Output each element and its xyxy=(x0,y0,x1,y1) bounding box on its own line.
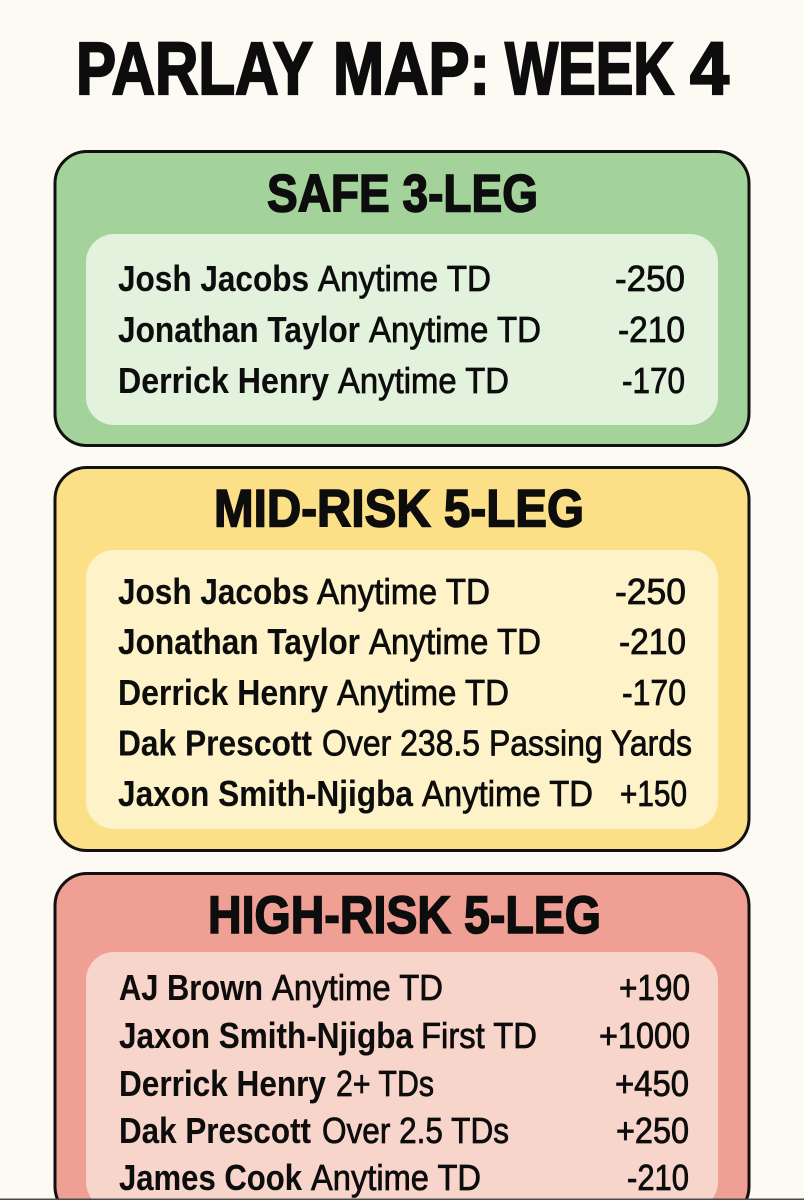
list: mid-risk 5-leg legs: Anytime TD xyxy=(337,672,509,713)
list: high-risk 5-leg legs: AJ Brown xyxy=(119,967,263,1008)
list: mid-risk 5-leg legs: -210 xyxy=(619,621,686,662)
list: high-risk 5-leg legs: Derrick Henry xyxy=(119,1063,326,1104)
list: high-risk 5-leg legs: 2+ TDs xyxy=(336,1063,434,1104)
panel: high-risk 5-leg xyxy=(55,874,749,1200)
title: WEEK xyxy=(505,27,674,110)
heading: high-risk 5-leg: HIGH-RISK 5-LEG xyxy=(208,886,601,945)
list: safe 3-leg legs: Anytime TD xyxy=(318,258,491,299)
list: high-risk 5-leg legs: Dak Prescott xyxy=(119,1110,311,1151)
list: safe 3-leg legs: -170 xyxy=(622,360,685,401)
list: mid-risk 5-leg legs: Jonathan Taylor xyxy=(118,621,360,662)
list: high-risk 5-leg legs: Jaxon Smith-Njigba xyxy=(119,1015,414,1056)
list: safe 3-leg legs: -210 xyxy=(618,309,685,350)
list: safe 3-leg legs: Derrick Henry xyxy=(118,360,329,401)
list: safe 3-leg legs: Jonathan Taylor xyxy=(118,309,360,350)
list: high-risk 5-leg legs: Over 2.5 TDs xyxy=(322,1110,509,1151)
list: mid-risk 5-leg legs: Dak Prescott xyxy=(118,722,312,764)
list: mid-risk 5-leg legs: Derrick Henry xyxy=(118,672,328,713)
list: high-risk 5-leg legs: +250 xyxy=(616,1110,689,1151)
list: high-risk 5-leg legs: James Cook xyxy=(119,1157,303,1198)
list: mid-risk 5-leg legs: +150 xyxy=(620,773,687,814)
list: mid-risk 5-leg legs: Over 238.5 Passing Yards xyxy=(322,722,692,764)
list: safe 3-leg legs: -250 xyxy=(615,258,685,299)
panel: mid-risk 5-leg xyxy=(55,468,749,850)
panel: safe 3-leg xyxy=(55,152,749,446)
title: PARLAY xyxy=(76,27,313,110)
list: mid-risk 5-leg legs: -250 xyxy=(615,571,686,612)
list: safe 3-leg legs: Anytime TD xyxy=(338,360,509,401)
list: high-risk 5-leg legs: Anytime TD xyxy=(272,967,443,1008)
heading: mid-risk 5-leg: MID-RISK 5-LEG xyxy=(214,480,584,538)
list: mid-risk 5-leg legs: Anytime TD xyxy=(369,621,541,662)
list: high-risk 5-leg legs: Anytime TD xyxy=(311,1157,481,1198)
list: high-risk 5-leg legs xyxy=(86,952,718,1200)
list: mid-risk 5-leg legs: Jaxon Smith-Njigba xyxy=(118,773,414,814)
list: safe 3-leg legs xyxy=(86,234,718,425)
list: high-risk 5-leg legs: +1000 xyxy=(599,1015,690,1056)
heading: safe 3-leg: SAFE 3-LEG xyxy=(267,164,538,224)
title: 4 xyxy=(690,27,729,110)
title: MAP: xyxy=(333,27,490,110)
list: high-risk 5-leg legs: +190 xyxy=(619,967,690,1008)
list: mid-risk 5-leg legs xyxy=(86,550,718,829)
list: mid-risk 5-leg legs: Josh Jacobs xyxy=(118,571,309,612)
list: safe 3-leg legs: Josh Jacobs xyxy=(118,258,309,299)
list: high-risk 5-leg legs: +450 xyxy=(615,1063,689,1104)
title xyxy=(76,27,729,110)
list: safe 3-leg legs: Anytime TD xyxy=(369,309,541,350)
list: high-risk 5-leg legs: First TD xyxy=(421,1015,537,1056)
list: mid-risk 5-leg legs: Anytime TD xyxy=(422,773,593,814)
list: mid-risk 5-leg legs: -170 xyxy=(622,672,686,713)
list: mid-risk 5-leg legs: Anytime TD xyxy=(317,571,490,612)
list: high-risk 5-leg legs: -210 xyxy=(627,1157,689,1198)
